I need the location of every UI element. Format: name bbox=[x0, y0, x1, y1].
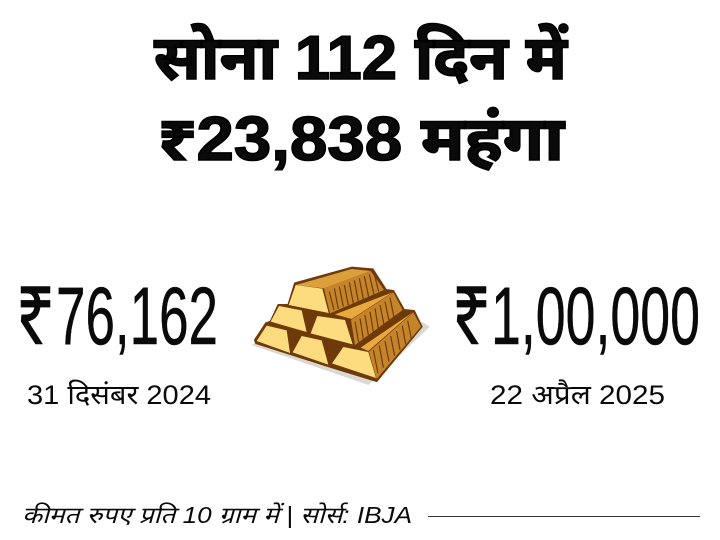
right date: 22 अप्रैल 2025 bbox=[490, 379, 665, 410]
top bar bbox=[289, 269, 384, 313]
title bbox=[154, 23, 569, 174]
left price: ₹ bbox=[16, 262, 54, 364]
title: सोना 112 दिन में bbox=[154, 23, 569, 93]
bottom bars bbox=[257, 312, 421, 379]
icon: gold bars bbox=[252, 268, 430, 385]
source note: कीमत रुपए प्रति 10 ग्राम में | सोर्स: IBJA bbox=[22, 502, 412, 528]
left date: 31 दिसंबर 2024 bbox=[27, 380, 211, 410]
left price bbox=[16, 262, 218, 364]
title: ₹23,838 महंगा bbox=[158, 105, 566, 174]
right price: ₹ bbox=[452, 262, 490, 364]
middle bars bbox=[271, 292, 403, 345]
left price: 76,162 bbox=[56, 271, 218, 362]
